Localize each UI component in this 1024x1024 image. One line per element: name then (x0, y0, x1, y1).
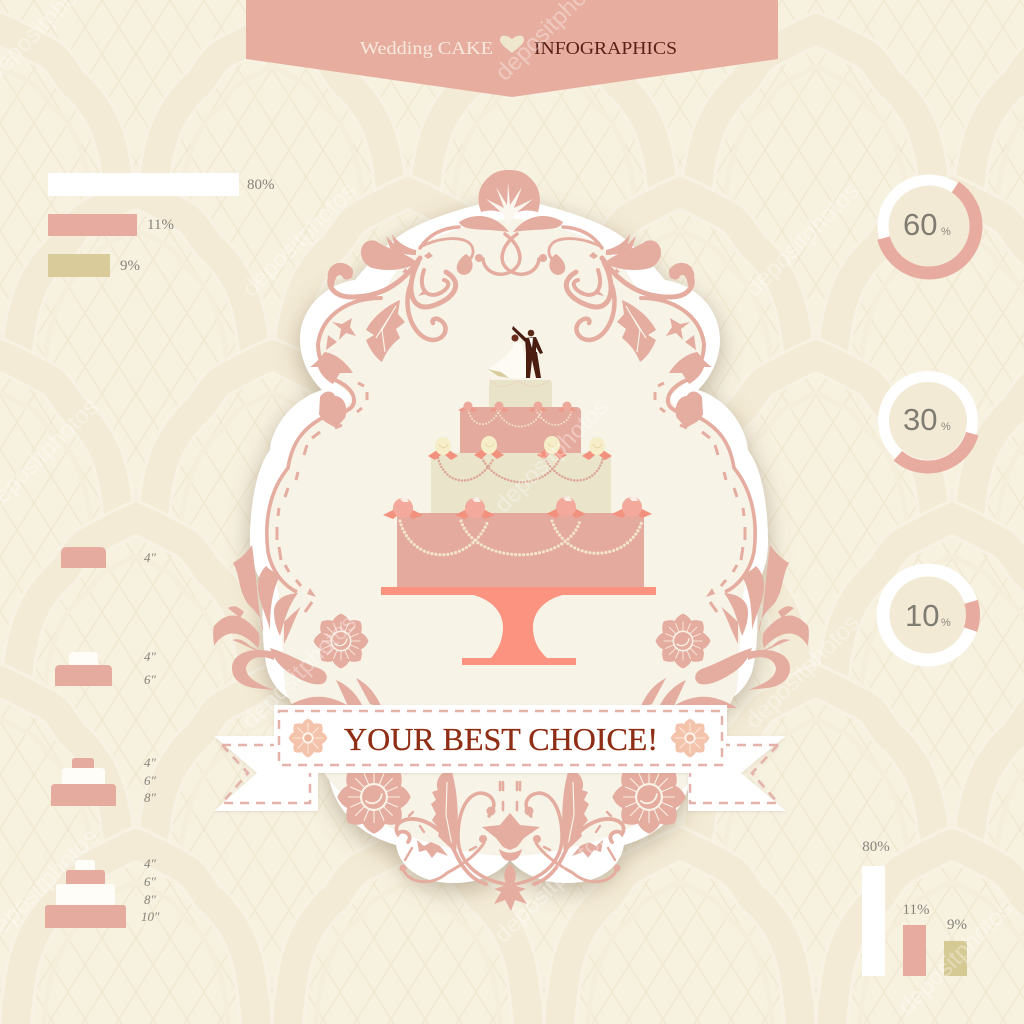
vertical bar chart: 9% (947, 917, 967, 933)
sugar roses (383, 402, 652, 519)
banner text: YOUR BEST CHOICE! (344, 721, 658, 757)
tier 4 (489, 380, 552, 408)
ribbon centre (274, 705, 727, 773)
donut chart 60%: % (941, 226, 951, 238)
horizontal bar chart (48, 173, 274, 277)
watermarks: depositphotos (740, 177, 865, 302)
bride and groom topper (487, 326, 543, 378)
donut chart 10%: 10 (905, 598, 939, 633)
flower left (313, 613, 369, 669)
horizontal bar chart: 9% (120, 258, 140, 274)
frame cream inner (267, 218, 755, 856)
donut chart 60%: 60 (903, 207, 937, 242)
frame white card (250, 196, 768, 883)
donut chart 30%: 30 (903, 402, 937, 437)
cake 3 tiers: 6″ (144, 773, 156, 788)
header text: wedding cake: Wedding CAKE (360, 38, 493, 58)
watermarks: depositphotos (237, 177, 362, 302)
banner flower right (671, 719, 709, 757)
donut chart 60% (882, 179, 976, 273)
ribbon tail left (214, 736, 318, 811)
horizontal bar chart: 80% (247, 177, 274, 193)
cake 1 tier (61, 547, 156, 568)
tier 3 (460, 407, 581, 453)
tier 2 (431, 453, 611, 513)
cake 4 tiers: 8″ (144, 892, 156, 907)
cake 3 tiers (51, 755, 156, 806)
cake 3 tiers: 8″ (144, 790, 156, 805)
watermarks: depositphotos (893, 895, 1018, 1020)
cake 4 tiers: 10″ (141, 909, 160, 924)
garlands (400, 380, 642, 555)
watermarks: depositphotos (489, 393, 614, 518)
cake 4 tiers: 6″ (144, 874, 156, 889)
watermarks: depositphotos (237, 609, 362, 734)
icon: heart (500, 36, 524, 53)
tier 1 (397, 513, 644, 587)
ribbon tail right (688, 736, 786, 811)
panel: cake size guide (45, 547, 160, 928)
vertical bar chart: 80% (862, 839, 890, 855)
cake 2 tiers: 4″ (144, 649, 156, 664)
bottom center lily (482, 813, 540, 850)
vertical bar chart (862, 839, 967, 976)
cake 2 tiers: 6″ (144, 672, 156, 687)
donut chart 10%: % (941, 617, 951, 629)
banner flower left (289, 719, 327, 757)
watermarks: depositphotos (489, 823, 614, 948)
right scrollwork (502, 216, 809, 712)
ribbon banner (214, 705, 786, 811)
vertical bar chart: 11% (903, 902, 929, 918)
flower right (655, 613, 711, 669)
donut chart 10% (883, 570, 973, 660)
donut chart 30%: % (941, 421, 951, 433)
cake 4 tiers (45, 856, 160, 928)
cake 2 tiers (55, 649, 156, 687)
cake 3 tiers: 4″ (144, 755, 156, 770)
panel: ornate cake frame (213, 170, 809, 911)
flower lower right (612, 760, 686, 834)
wedding cake illustration (381, 326, 656, 665)
flower lower left (337, 760, 411, 834)
bottom scrollwork left (396, 772, 517, 885)
bottom cup (499, 849, 522, 861)
horizontal bar chart: 11% (147, 217, 174, 233)
watermarks: depositphotos (740, 609, 865, 734)
cake stand (381, 587, 656, 665)
top header ribbon (246, 0, 778, 97)
bottom pendant (494, 864, 527, 911)
bottom scrollwork right (503, 772, 624, 885)
donut chart 30% (882, 375, 974, 467)
top shell ornament (478, 170, 540, 226)
cake 4 tiers: 4″ (144, 856, 156, 871)
cake 1 tier: 4″ (144, 550, 156, 565)
header text: infographics: INFOGRAPHICS (534, 38, 677, 58)
left scrollwork (213, 216, 520, 712)
